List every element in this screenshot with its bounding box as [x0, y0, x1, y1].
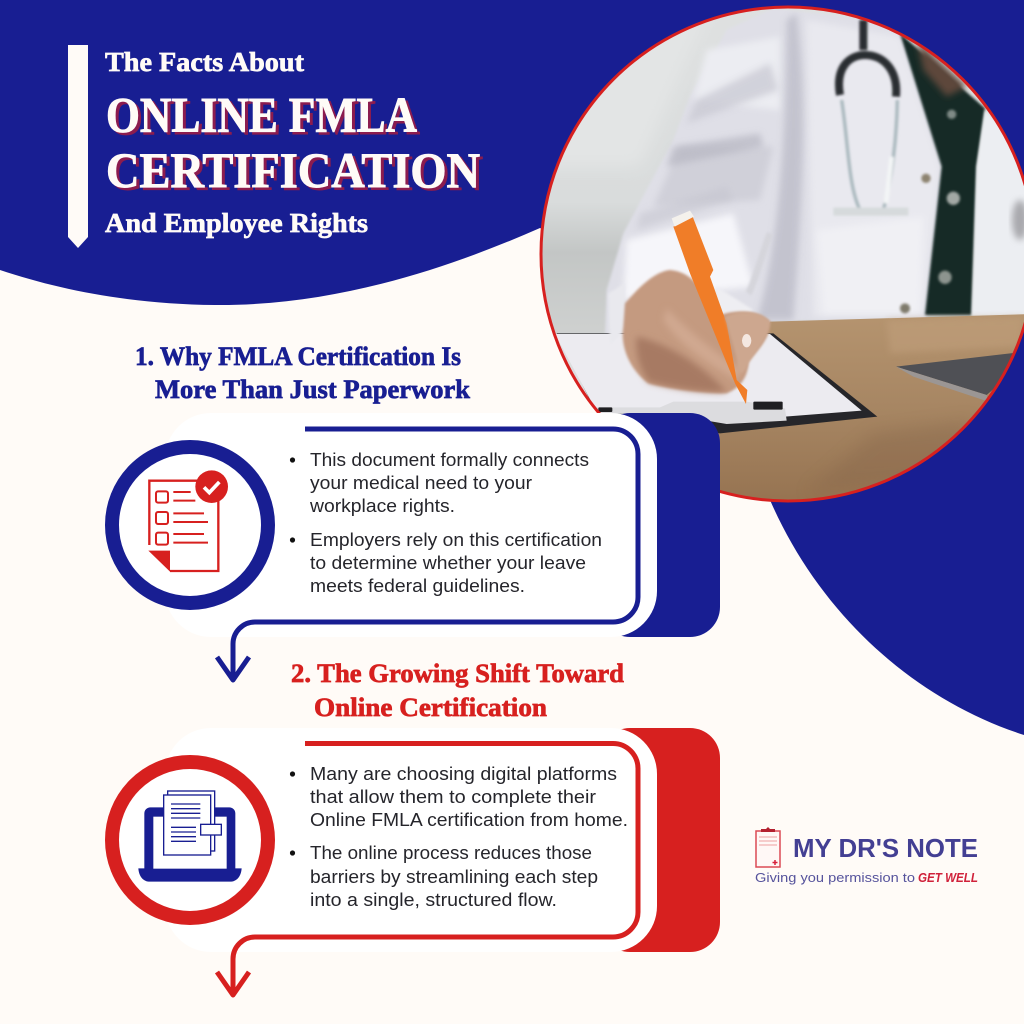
text block: section 2 bullets: into a single, structured flow. [310, 890, 557, 910]
connector arrow: section 1 [217, 429, 638, 680]
text block: section 2 bullets: that allow them to complete their [310, 787, 596, 807]
icon: checklist document [112, 447, 268, 603]
text block: section 1 bullets: Employers rely on this certification [310, 530, 602, 550]
hand behind pen [608, 290, 624, 334]
heading: section 2: 2. The Growing Shift Toward [291, 659, 625, 688]
photo: doctor writing on clipboard [540, 0, 1024, 513]
icon: laptop with documents [112, 762, 268, 918]
heading: section 1 [135, 342, 471, 404]
title block: CERTIFICATION [106, 142, 480, 198]
logo: My Dr's Note [755, 827, 978, 885]
title block: ONLINE FMLA [109, 89, 420, 145]
text block: section 1 bullets: This document formally connects [310, 450, 589, 470]
logo: My Dr's Note: Giving you permission to [755, 870, 915, 885]
title block: ONLINE FMLA [106, 86, 417, 142]
title ribbon [68, 45, 88, 248]
logo: My Dr's Note: MY DR'S NOTE [793, 833, 978, 863]
blue background shape [0, 0, 1024, 735]
text block: section 2 bullets: barriers by streamlining each step [310, 867, 598, 887]
heading: section 1: 1. Why FMLA Certification Is [135, 342, 461, 371]
title block: CERTIFICATION [109, 144, 483, 200]
coat body and sleeve [604, 100, 935, 334]
text block: section 1 bullets: meets federal guidelines. [310, 576, 525, 596]
text block: section 1 bullets: to determine whether your leave [310, 553, 586, 573]
heading: section 2 [291, 659, 625, 722]
icon: clipboard [756, 827, 780, 867]
laptop [896, 353, 1017, 395]
heading: section 1: More Than Just Paperwork [155, 375, 471, 404]
stethoscope [833, 20, 908, 212]
clipboard [557, 333, 877, 433]
text block: section 2 bullets [290, 764, 628, 910]
text block: section 2 bullets: The online process reduces those [310, 843, 592, 863]
right coat panel [972, 110, 1024, 317]
connector arrow: section 2 [217, 744, 638, 995]
title block: The Facts About [105, 47, 304, 77]
heading: section 2: Online Certification [314, 693, 548, 722]
panel: section 1 card [165, 413, 720, 680]
desk [718, 314, 1024, 500]
logo: My Dr's Note: GET WELL [918, 870, 978, 885]
text block: section 1 bullets: workplace rights. [309, 496, 455, 516]
text block: section 2 bullets: Online FMLA certification from home. [310, 810, 628, 830]
pen [673, 217, 747, 404]
panel: section 2 card [165, 728, 720, 995]
title block [105, 47, 483, 238]
wall [542, 213, 970, 334]
dark shirt [900, 33, 985, 315]
text block: section 1 bullets [290, 450, 602, 596]
finger over pen [725, 312, 770, 373]
title block: And Employee Rights [105, 208, 368, 238]
text block: section 1 bullets: your medical need to your [310, 473, 532, 493]
text block: section 2 bullets: Many are choosing digital platforms [310, 764, 617, 784]
